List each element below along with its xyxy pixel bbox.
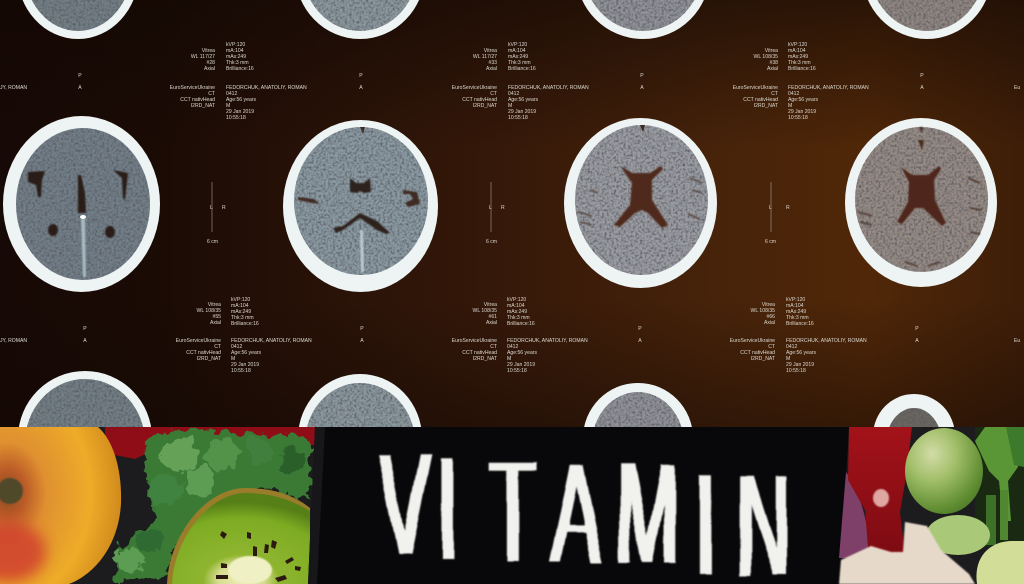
scan info block: upper centre: mA:104 <box>508 48 526 54</box>
scan info block: lower right: 29 Jan 2019 <box>786 362 814 368</box>
scan info block: lower left: CCT nativHead <box>186 350 221 356</box>
scan info block: lower left: #55 <box>212 314 221 320</box>
brain scan: top 3 <box>576 0 710 39</box>
scan info block: lower left: kVP:120 <box>231 297 250 303</box>
scan info block: upper right: Brilliance:16 <box>788 66 816 72</box>
photo: kale leaves <box>112 428 310 580</box>
scan info block: lower centre: WL 108/35 <box>473 308 497 314</box>
scan info block: lower left: Axial <box>210 320 221 326</box>
orientation markers and edge labels: P <box>78 73 82 79</box>
scan info block: lower left: Thk:3 mm <box>231 315 254 321</box>
scan info block: lower centre: CT <box>490 344 497 350</box>
brain scan: top 2 <box>295 0 425 39</box>
scan info block: upper left: mAs:249 <box>226 54 246 60</box>
scale bars <box>207 182 790 245</box>
scan info block: lower left: Age:56 years <box>231 350 261 356</box>
scan info block: lower left <box>176 297 312 374</box>
scale bars: R <box>222 205 226 211</box>
scan info block: lower right: mA:104 <box>786 303 804 309</box>
orientation markers and edge labels: P <box>640 73 644 79</box>
orientation markers and edge labels: P <box>638 326 642 332</box>
scan info block: upper left: FEDORCHUK, ANATOLIY, ROMAN <box>226 85 307 91</box>
scan info block: lower centre: M <box>507 356 511 362</box>
scan info block: upper left: Brilliance:16 <box>226 66 254 72</box>
scan info block: lower centre <box>452 297 588 374</box>
photo: cabbage bottom right <box>976 541 1024 584</box>
photo: knitted cloth <box>839 522 975 584</box>
scale bars: R <box>501 205 505 211</box>
scan info block: lower left: M <box>231 356 235 362</box>
panel: top row of brain scans <box>17 0 992 39</box>
scan info block: lower centre: FEDORCHUK, ANATOLIY, ROMAN <box>507 338 588 344</box>
photo: brussels sprout top <box>905 428 983 514</box>
scan info block: upper right: mA:104 <box>788 48 806 54</box>
panel: bottom row of brain scans <box>18 371 955 507</box>
scan info block: upper right: CCT nativHead <box>743 97 778 103</box>
scan info block: lower centre: CCT nativHead <box>462 350 497 356</box>
scan info block: upper centre: mAs:249 <box>508 54 528 60</box>
scan info block: lower right: CT <box>768 344 775 350</box>
scan info block: upper right: CT <box>771 91 778 97</box>
scan info block: upper left: EuroServiceUkraine <box>170 85 215 91</box>
photo: kiwi slice <box>167 488 310 584</box>
orientation markers and edge labels: Eu <box>1014 85 1020 91</box>
scan info block: upper centre: M <box>508 103 512 109</box>
scan info block: upper left: kVP:120 <box>226 42 245 48</box>
scan info block: lower centre: Age:56 years <box>507 350 537 356</box>
brain scan: bottom 4 <box>873 394 955 480</box>
scan info block: upper right: EuroServiceUkraine <box>733 85 778 91</box>
scan info block: upper right: kVP:120 <box>788 42 807 48</box>
scan info block: lower left: 10:55:18 <box>231 368 251 374</box>
brain scan: bottom 1 <box>18 371 152 507</box>
scan info block: lower left: Brilliance:16 <box>231 321 259 327</box>
scan info block: lower centre: kVP:120 <box>507 297 526 303</box>
scan info block: lower centre: Thk:3 mm <box>507 315 530 321</box>
orientation markers and edge labels: A <box>360 338 364 344</box>
scan info block: upper left: Axial <box>204 66 215 72</box>
brain scan: middle 4 <box>845 118 997 287</box>
photo: red onion <box>839 472 868 558</box>
scan info block: lower left: mAs:249 <box>231 309 251 315</box>
orientation markers and edge labels: A <box>83 338 87 344</box>
orientation markers and edge labels <box>0 73 1020 344</box>
scan info block: upper left: #28 <box>206 60 215 66</box>
scan info block: upper centre <box>452 42 589 121</box>
brain scan: middle 3 <box>564 118 717 288</box>
scale bars: R <box>786 205 790 211</box>
scale bars: 6 cm <box>486 239 497 245</box>
scan info block: upper centre: CCT nativHead <box>462 97 497 103</box>
scan info block: lower right: Vitrea <box>762 302 775 308</box>
brain scan: top 1 <box>17 0 139 39</box>
scan info block: lower centre: I2RD_NAT <box>473 356 497 362</box>
scan info block: lower centre: EuroServiceUkraine <box>452 338 497 344</box>
scan info block: lower left: mA:104 <box>231 303 249 309</box>
scan info block: lower left: Vitrea <box>208 302 221 308</box>
scan info block: lower right: Brilliance:16 <box>786 321 814 327</box>
scan info block: upper right: mAs:249 <box>788 54 808 60</box>
scan info block: upper centre: Axial <box>486 66 497 72</box>
scan info block: lower right: EuroServiceUkraine <box>730 338 775 344</box>
scan info block: upper left: I2RD_NAT <box>191 103 215 109</box>
photo: red pepper <box>848 427 912 560</box>
scan info block: upper centre: Brilliance:16 <box>508 66 536 72</box>
scan info block: upper centre: WL 117/27 <box>473 54 497 60</box>
scan info block: lower right <box>730 297 867 374</box>
scan info block: upper right: Vitrea <box>765 48 778 54</box>
scan info block: lower centre: Vitrea <box>484 302 497 308</box>
scan info block: upper right: FEDORCHUK, ANATOLIY, ROMAN <box>788 85 869 91</box>
scale bars: 6 cm <box>207 239 218 245</box>
orientation markers and edge labels: A <box>920 85 924 91</box>
brain scan: middle 2 <box>283 120 438 292</box>
scan info block: lower left: FEDORCHUK, ANATOLIY, ROMAN <box>231 338 312 344</box>
scan info block: lower centre: 29 Jan 2019 <box>507 362 535 368</box>
scan info block: lower right: Axial <box>764 320 775 326</box>
scan info block: lower centre: mAs:249 <box>507 309 527 315</box>
scan info block: upper left: mA:104 <box>226 48 244 54</box>
scan info block: lower left: I2RD_NAT <box>197 356 221 362</box>
scan info block: lower centre: #61 <box>488 314 497 320</box>
orientation markers and edge labels: P <box>359 73 363 79</box>
photo: red pepper behind apple <box>105 427 315 459</box>
scale bars: L <box>210 205 213 211</box>
scan info block: lower centre: mA:104 <box>507 303 525 309</box>
scan info block: lower centre: Brilliance:16 <box>507 321 535 327</box>
panel: middle row of brain scans <box>3 116 997 292</box>
scan info block: lower right: Thk:3 mm <box>786 315 809 321</box>
scan info block: lower right: Age:56 years <box>786 350 816 356</box>
orientation markers and edge labels: A <box>638 338 642 344</box>
scan info block: upper centre: Thk:3 mm <box>508 60 531 66</box>
scan info block: lower left: 0412 <box>231 344 242 350</box>
scan info block: upper centre: #33 <box>488 60 497 66</box>
scan info block: upper left: Vitrea <box>202 48 215 54</box>
scan info block: upper centre: 10:55:18 <box>508 115 528 121</box>
scan info block: upper centre: EuroServiceUkraine <box>452 85 497 91</box>
scan info block: upper right: 0412 <box>788 91 799 97</box>
scale bars: 6 cm <box>765 239 776 245</box>
orientation markers and edge labels: P <box>360 326 364 332</box>
scan info block: upper right: Age:56 years <box>788 97 818 103</box>
scan info block: upper centre: kVP:120 <box>508 42 527 48</box>
orientation markers and edge labels: JY, ROMAN <box>0 85 27 91</box>
scale bars: L <box>769 205 772 211</box>
scan info block: upper left: WL 117/27 <box>191 54 215 60</box>
scan info block: upper right: Axial <box>767 66 778 72</box>
photo: brussels sprout middle <box>926 515 990 555</box>
scan info block: lower centre: 0412 <box>507 344 518 350</box>
scan info block: upper left: 10:55:18 <box>226 115 246 121</box>
brain scan: top 4 <box>862 0 992 39</box>
scan info block: upper left: 29 Jan 2019 <box>226 109 254 115</box>
scan info block: upper left <box>170 42 307 121</box>
scan info block: upper centre: I2RD_NAT <box>473 103 497 109</box>
scan info block: lower right: 10:55:18 <box>786 368 806 374</box>
scan info block: lower centre: 10:55:18 <box>507 368 527 374</box>
orientation markers and edge labels: P <box>915 326 919 332</box>
scan info block: upper right: 10:55:18 <box>788 115 808 121</box>
scan info block: lower right: FEDORCHUK, ANATOLIY, ROMAN <box>786 338 867 344</box>
orientation markers and edge labels: A <box>78 85 82 91</box>
handwritten word: V <box>380 422 430 584</box>
orientation markers and edge labels: A <box>640 85 644 91</box>
orientation markers and edge labels: A <box>915 338 919 344</box>
scan info block: lower right: mAs:249 <box>786 309 806 315</box>
scale bars: L <box>489 205 492 211</box>
scan info block: upper centre: FEDORCHUK, ANATOLIY, ROMAN <box>508 85 589 91</box>
scan info block: upper left: Age:56 years <box>226 97 256 103</box>
orientation markers and edge labels: P <box>83 326 87 332</box>
scan info block: upper centre: Age:56 years <box>508 97 538 103</box>
panel: food photo strip <box>0 422 1024 584</box>
handwritten word <box>380 422 790 584</box>
background: CT film <box>0 0 1024 427</box>
scan info block: upper centre: CT <box>490 91 497 97</box>
orientation markers and edge labels: P <box>920 73 924 79</box>
scan info block: lower left: WL 108/35 <box>197 308 221 314</box>
orientation markers and edge labels: A <box>359 85 363 91</box>
brain scan: bottom 2 <box>298 374 422 503</box>
chalkboard <box>308 427 849 584</box>
orientation markers and edge labels: JY, ROMAN <box>0 338 27 344</box>
scan info block: upper centre: 29 Jan 2019 <box>508 109 536 115</box>
scan info block: lower right: 0412 <box>786 344 797 350</box>
scan info block: upper centre: Vitrea <box>484 48 497 54</box>
scan info block: upper right: I2RD_NAT <box>754 103 778 109</box>
brain scan: middle 1 <box>3 116 160 292</box>
scan info block: upper left: 0412 <box>226 91 237 97</box>
scan info block: upper right: WL 108/35 <box>754 54 778 60</box>
scan info block: lower left: EuroServiceUkraine <box>176 338 221 344</box>
scan info block: lower left: 29 Jan 2019 <box>231 362 259 368</box>
orientation markers and edge labels: Eu <box>1014 338 1020 344</box>
scan info block: upper right: M <box>788 103 792 109</box>
scan info block: upper right: Thk:3 mm <box>788 60 811 66</box>
scan info block: upper right: 29 Jan 2019 <box>788 109 816 115</box>
scan info block: lower right: kVP:120 <box>786 297 805 303</box>
scan info block: lower right: CCT nativHead <box>740 350 775 356</box>
scan info block: upper right: #38 <box>770 60 778 66</box>
scan info block: lower right: WL 108/35 <box>751 308 775 314</box>
scan info block: lower right: I2RD_NAT <box>751 356 775 362</box>
photo: celery and greens <box>975 427 1024 547</box>
scan info block: lower right: M <box>786 356 790 362</box>
scan info block: upper left: M <box>226 103 230 109</box>
scan info block: upper right <box>733 42 869 121</box>
scan info block: lower right: #66 <box>766 314 775 320</box>
scan info block: upper left: CT <box>208 91 215 97</box>
scan info block: upper centre: 0412 <box>508 91 519 97</box>
brain scan: bottom 3 <box>583 383 693 496</box>
photo: apple <box>0 427 121 584</box>
scan info block: lower centre: Axial <box>486 320 497 326</box>
scan info block: upper left: Thk:3 mm <box>226 60 249 66</box>
scan info block: upper left: CCT nativHead <box>180 97 215 103</box>
scan info block: lower left: CT <box>214 344 221 350</box>
